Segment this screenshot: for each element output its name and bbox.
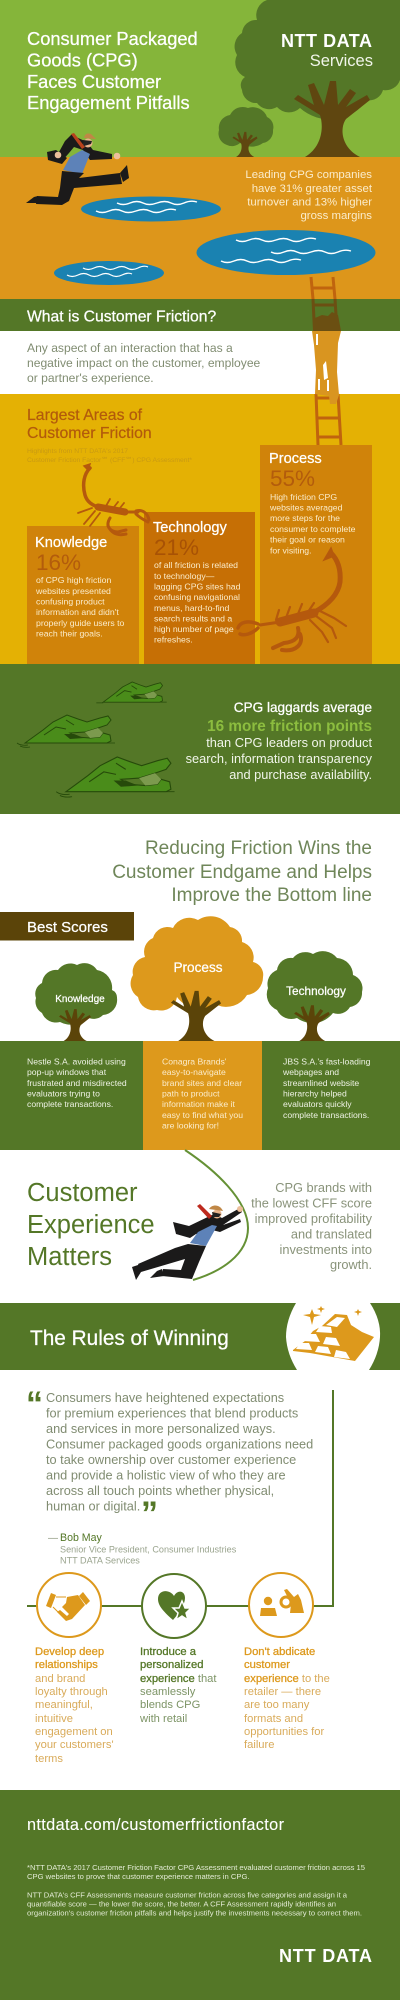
text: friction definition: negative impact on the customer, employee	[27, 356, 261, 370]
panel: knowledge best score	[0, 1041, 143, 1150]
text: friction definition: or partner's experience.	[27, 371, 154, 385]
title: Engagement Pitfalls	[27, 92, 190, 113]
text: quote by Bob May: Consumer packaged goods organizations need	[46, 1436, 313, 1452]
text: develop deep relationships: your customers'	[35, 1739, 114, 1751]
panel: knowledge: of CPG high friction	[36, 575, 111, 585]
panel: footer	[0, 1790, 400, 2000]
panel: technology: to technology—	[154, 571, 215, 581]
panel: knowledge: confusing product	[36, 596, 105, 606]
panel: technology best score: webpages and	[282, 1067, 339, 1077]
text: CFF score profitability	[251, 1180, 373, 1272]
text: laggards statistic	[186, 700, 373, 782]
text: leading CPG companies: Leading CPG companies	[245, 169, 372, 181]
text: quote by Bob May	[26, 1385, 313, 1533]
text: laggards statistic: and purchase availability.	[229, 767, 372, 782]
title: Goods (CPG)	[27, 50, 138, 70]
panel: technology: 21%	[154, 535, 199, 560]
panel: technology: of all friction is related	[154, 560, 238, 570]
tree: knowledge	[35, 963, 117, 1041]
text: footnotes: CPG websites to prove that customer experience matters in CPG.	[27, 1872, 250, 1881]
text: friction definition	[27, 341, 261, 385]
icon: pond 2	[196, 230, 376, 275]
text: develop deep relationships: relationships	[35, 1659, 98, 1671]
panel: process best score: path to product	[162, 1088, 220, 1098]
icon: scorpion upper left	[78, 464, 149, 535]
text: CFF score profitability: growth.	[330, 1257, 372, 1272]
heading: reducing friction: Reducing Friction Wins the	[145, 838, 372, 859]
text: laggards statistic: 16 more friction points	[207, 718, 372, 735]
panel: header sky	[0, 0, 400, 157]
icon: pond 1	[81, 196, 221, 222]
title: Consumer Packaged	[27, 28, 198, 49]
icon: large tree	[235, 0, 400, 157]
icon: crocodile middle	[17, 715, 115, 747]
panel: knowledge: websites presented	[35, 586, 111, 596]
panel: technology: refreshes.	[154, 634, 193, 644]
heading: best scores	[0, 912, 134, 940]
panel: knowledge: Knowledge	[35, 535, 107, 551]
text: CFF score profitability: and translated	[291, 1226, 372, 1242]
text: quote by Bob May: across all touch points whether physical,	[46, 1483, 274, 1498]
text: quote by Bob May: and services in more personalized ways.	[46, 1421, 276, 1436]
heading: best scores: Best Scores	[27, 919, 108, 936]
text: don't abdicate customer experience: are too many	[244, 1699, 310, 1711]
text: introduce personalized experience: blends CPG	[140, 1699, 200, 1711]
text: leading CPG companies: have 31% greater asset	[252, 183, 373, 195]
text: develop deep relationships: meaningful,	[35, 1699, 93, 1711]
panel: process: Process	[269, 451, 322, 467]
panel: technology best score	[262, 1041, 400, 1150]
heading: the rules of winning: The Rules of Winning	[30, 1327, 229, 1350]
connector line	[27, 1390, 333, 1606]
icon: curved rope	[185, 1150, 248, 1280]
panel: technology best score: evaluators quickly	[283, 1099, 352, 1109]
tree: process: Process	[173, 960, 223, 975]
heading: reducing friction: Improve the Bottom line	[171, 885, 372, 906]
text: CFF score profitability: CPG brands with	[275, 1180, 372, 1195]
panel: technology: confusing navigational	[154, 592, 240, 602]
text: introduce personalized experience	[139, 1646, 217, 1725]
text: laggards statistic: CPG laggards average	[234, 700, 372, 715]
panel: knowledge best score: Nestle S.A. avoided using	[27, 1056, 126, 1066]
text: leading CPG companies	[245, 169, 373, 222]
logo: NTT DATA footer: NTT DATA	[279, 1946, 372, 1966]
panel: technology best score: JBS S.A.'s fast-loading	[283, 1056, 371, 1066]
heading: reducing friction	[112, 838, 372, 906]
heading: largest areas of customer friction	[27, 407, 152, 442]
text: develop deep relationships: engagement on	[35, 1726, 113, 1738]
panel: technology: search results and a	[154, 614, 232, 624]
text: footnotes: organization's customer friction pitfalls and helps justify the investments necessary to correct them.	[27, 1908, 362, 1918]
text: footnotes: *NTT DATA's 2017 Customer Friction Factor CPG Assessment evaluated customer friction across 15	[27, 1863, 365, 1872]
text: don't abdicate customer experience: failure	[244, 1739, 274, 1751]
panel: knowledge best score: pop-up windows that	[27, 1067, 107, 1077]
icon: small tree	[218, 107, 273, 157]
tree: technology	[267, 951, 363, 1041]
panel: knowledge best score: complete transactions.	[27, 1099, 113, 1109]
panel: knowledge: information and didn't	[36, 607, 119, 617]
panel: technology: Technology	[153, 520, 228, 536]
text: introduce personalized experience: with retail	[139, 1713, 187, 1725]
tree: technology: Technology	[286, 984, 346, 998]
heading: customer experience matters: Customer	[27, 1179, 138, 1207]
text: develop deep relationships: loyalty through	[35, 1686, 108, 1698]
logo: NTT DATA Services: Services	[310, 52, 373, 70]
text: attribution: Bob May	[60, 1532, 103, 1544]
icon: scorpion lower right	[238, 548, 346, 650]
icon: gold bars	[286, 1303, 380, 1370]
icon: person and ok hand	[249, 1573, 313, 1637]
text: attribution: —	[48, 1533, 58, 1544]
text: laggards statistic: search, information transparency	[186, 751, 373, 766]
text: attribution	[48, 1532, 237, 1566]
icon: ladder with climbing man	[311, 277, 341, 445]
text: quote by Bob May: ”	[141, 1495, 158, 1533]
text: quote by Bob May: human or digital.	[46, 1498, 140, 1514]
panel: process best score: information make it	[162, 1099, 235, 1109]
text: develop deep relationships: terms	[35, 1753, 63, 1765]
heading: customer experience matters	[27, 1179, 155, 1271]
logo: NTT DATA Services: NTT DATA	[281, 31, 372, 51]
text: attribution: Senior Vice President, Consumer Industries	[60, 1544, 237, 1554]
text: don't abdicate customer experience: retailer — there	[244, 1686, 321, 1698]
text: quote by Bob May: for premium experiences that blend products	[46, 1406, 298, 1420]
panel: technology	[144, 512, 255, 664]
panel: knowledge	[27, 526, 139, 664]
text: leading CPG companies: turnover and 13% higher	[247, 196, 372, 208]
panel: process best score: easy to find what you	[162, 1110, 243, 1120]
panel: process: their goal or reason	[270, 534, 345, 544]
panel: technology: menus, hard-to-find	[154, 603, 229, 613]
text: footnotes	[27, 1863, 365, 1918]
text: introduce personalized experience: seamlessly	[140, 1686, 196, 1698]
panel: technology best score: streamlined website	[283, 1078, 359, 1088]
panel: process best score: brand sites and clear	[162, 1078, 242, 1088]
panel: largest areas of friction	[0, 394, 400, 664]
panel: knowledge: properly guide users to	[36, 618, 125, 628]
heading: customer experience matters: Experience	[27, 1211, 155, 1239]
text: footnotes: NTT DATA's CFF Assessments measure customer friction across five categories and assign it a	[27, 1890, 348, 1900]
heading: customer experience matters: Matters	[27, 1243, 112, 1271]
heading: largest areas of customer friction: Customer Friction	[27, 425, 152, 442]
panel: process	[260, 445, 372, 664]
panel: knowledge: 16%	[36, 550, 81, 575]
text: assessment source note	[27, 448, 192, 464]
text: website url: nttdata.com/customerfrictionfactor	[27, 1816, 285, 1834]
text: footnotes: quantifiable score — the lower the score, the better. A CFF Assessment rapidly identifies an	[27, 1900, 336, 1908]
text: quote by Bob May: “	[26, 1385, 43, 1423]
text: quote by Bob May: and provide a holistic view of who they are	[46, 1468, 286, 1482]
text: don't abdicate customer experience: formats and	[244, 1713, 303, 1725]
text: assessment source note: Customer Friction Factor℠ (CFF℠) CPG Assessment*	[27, 456, 192, 464]
icon: crocodile bottom	[56, 757, 175, 797]
heading: largest areas of customer friction: Largest Areas of	[27, 407, 143, 424]
panel: process: High friction CPG	[270, 492, 337, 502]
text: develop deep relationships: and brand	[35, 1673, 85, 1685]
text: quote by Bob May: to take ownership over customer experience	[46, 1452, 296, 1467]
text: don't abdicate customer experience: customer	[244, 1659, 290, 1671]
text: CFF score profitability: investments into	[280, 1242, 372, 1257]
panel: rules of winning band	[0, 1303, 400, 1370]
tree: process	[131, 916, 263, 1041]
panel: process: for visiting.	[270, 546, 312, 556]
logo: NTT DATA Services	[281, 31, 373, 70]
text: develop deep relationships: Develop deep	[35, 1646, 104, 1658]
text: don't abdicate customer experience: experience to the	[244, 1673, 330, 1685]
panel: process: 55%	[270, 466, 315, 491]
panel: knowledge: reach their goals.	[36, 628, 103, 638]
text: don't abdicate customer experience	[244, 1646, 330, 1751]
panel: process: more steps for the	[270, 513, 340, 523]
tree: knowledge: Knowledge	[55, 994, 105, 1005]
text: introduce personalized experience: Introduce a	[140, 1646, 197, 1658]
heading: what is customer friction: What is Customer Friction?	[27, 308, 216, 326]
icon: businessman hanging on rope	[132, 1204, 243, 1280]
panel: knowledge best score: frustrated and misdirected	[27, 1078, 127, 1088]
icon: handshake	[37, 1573, 101, 1637]
text: laggards statistic: than CPG leaders on product	[206, 735, 372, 750]
panel: technology: lagging CPG sites had	[154, 582, 241, 592]
panel: process best score: Conagra Brands'	[162, 1056, 227, 1066]
text: develop deep relationships: intuitive	[35, 1713, 73, 1725]
text: quote by Bob May: Consumers have heightened expectations	[46, 1390, 284, 1405]
panel: process best score: easy-to-navigate	[162, 1067, 226, 1077]
panel: process: websites averaged	[269, 502, 343, 512]
text: assessment source note: Highlights from NTT DATA's 2017	[27, 448, 128, 455]
panel: what is customer friction band	[0, 299, 400, 331]
panel: technology: high number of page	[154, 624, 234, 634]
panel: technology best score: hierarchy helped	[283, 1088, 347, 1098]
panel: process: consumer to complete	[270, 524, 356, 534]
icon: heart and star	[142, 1574, 206, 1638]
panel: knowledge best score: evaluators trying to	[27, 1088, 100, 1098]
panel: technology best score: complete transactions.	[283, 1110, 369, 1120]
title: Faces Customer	[27, 71, 161, 92]
text: CFF score profitability: improved profitability	[255, 1211, 373, 1226]
text: leading CPG companies: gross margins	[300, 210, 372, 222]
panel: process best score: are looking for!	[162, 1120, 219, 1130]
text: introduce personalized experience: personalized	[140, 1659, 203, 1671]
title	[27, 28, 198, 113]
text: develop deep relationships	[35, 1646, 114, 1765]
panel: orange ground	[0, 157, 400, 299]
text: don't abdicate customer experience: Don't abdicate	[244, 1646, 315, 1658]
text: friction definition: Any aspect of an interaction that has a	[27, 341, 233, 355]
text: introduce personalized experience: experience that	[140, 1673, 217, 1685]
text: CFF score profitability: the lowest CFF score	[251, 1196, 372, 1210]
panel: laggards band	[0, 664, 400, 814]
panel: process best score	[143, 1041, 262, 1150]
icon: pond 3	[54, 261, 164, 285]
icon: running businessman	[26, 133, 129, 205]
text: don't abdicate customer experience: opportunities for	[244, 1726, 324, 1738]
heading: reducing friction: Customer Endgame and Helps	[112, 862, 372, 883]
text: attribution: NTT DATA Services	[60, 1556, 140, 1566]
icon: crocodile top	[96, 682, 167, 703]
